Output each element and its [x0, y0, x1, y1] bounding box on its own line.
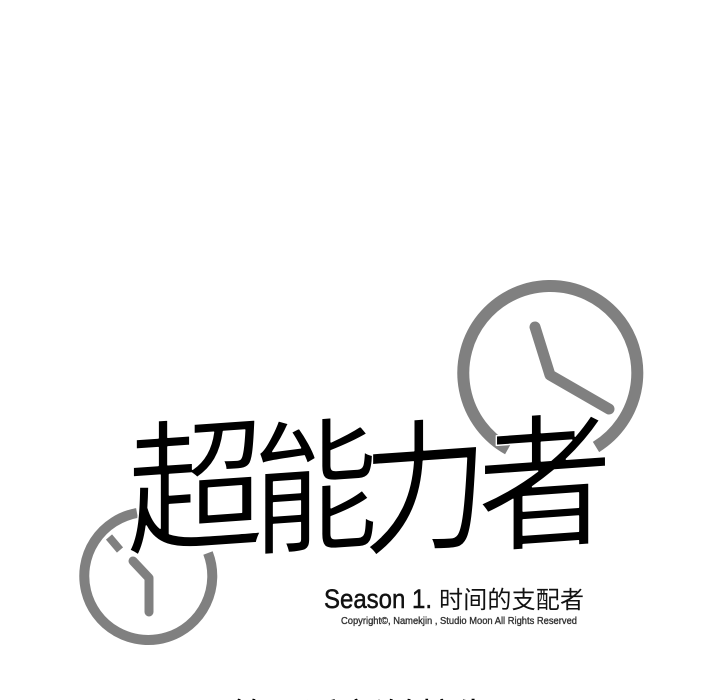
- title: 能: [252, 405, 378, 575]
- icon: small clock: [84, 513, 212, 640]
- icon: large clock: [463, 286, 637, 449]
- title: [126, 399, 613, 576]
- copyright line: Copyright©, Namekjin , Studio Moon All Rights Reserved: [341, 616, 577, 627]
- subtitle: season line: 时间的支配者: [439, 587, 584, 614]
- title: 超: [126, 405, 265, 576]
- title: 者: [477, 399, 613, 572]
- title: 力: [362, 405, 488, 575]
- subtitle: season line: Season 1.: [324, 584, 432, 614]
- subtitle: season line: [324, 584, 584, 614]
